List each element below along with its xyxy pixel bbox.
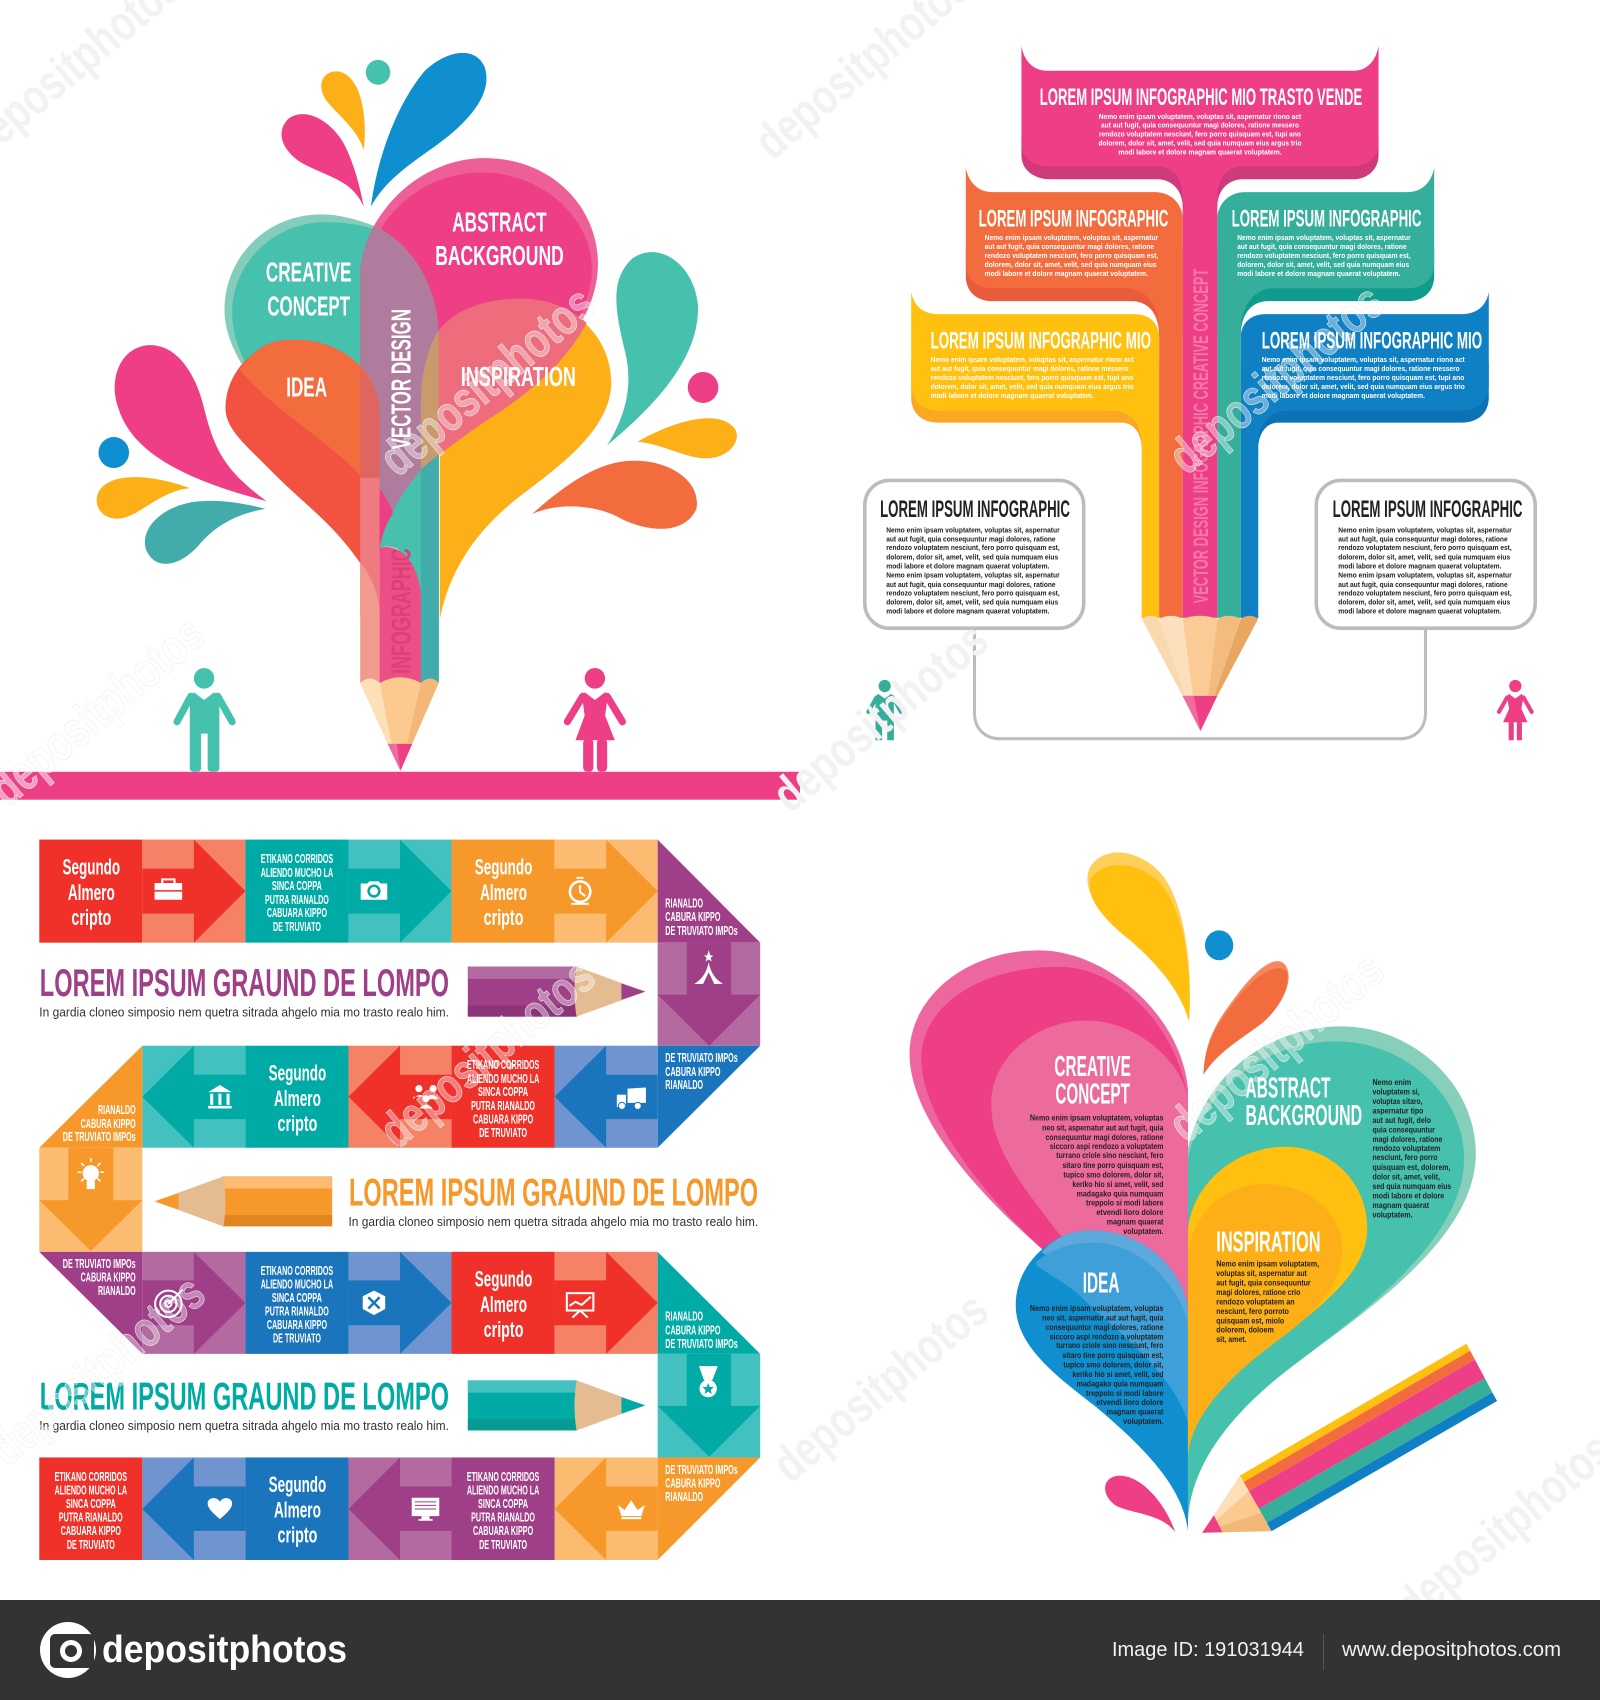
text: idea: turrano criole sino nesciunt, fero (1056, 1341, 1164, 1350)
text: creative concept: magnam quaerat (1107, 1217, 1164, 1226)
title and text: teal banner: LOREM IPSUM INFOGRAPHIC (1232, 206, 1421, 232)
title and text: blue banner (1262, 329, 1482, 400)
title and text: yellow banner: modi labore et dolore magnam quaerat voluptatem. (931, 391, 1094, 400)
banner: blue (1241, 292, 1489, 618)
heart: idea red (226, 340, 380, 563)
text: abstract background: sed quia numquam eius (1372, 1182, 1451, 1191)
title and text: top banner: LOREM IPSUM INFOGRAPHIC MIO TRASTO VENDE (1040, 85, 1362, 111)
text: inspiration: aut fugit, quia consequuntur (1216, 1278, 1311, 1288)
six-line text blocks: PUTRA RIANALDO (265, 1304, 329, 1319)
short labels: Segundo Almero cripto: cripto (484, 905, 523, 930)
short labels: Segundo Almero cripto: Almero (480, 880, 527, 905)
watermarks: depositphotos (762, 1281, 998, 1493)
heading: teal: In gardia cloneo simposio nem quetra sitrada ahgelo mia mo trasto realo him. (39, 1418, 449, 1433)
title and text: teal banner: aut aut fugit, quia consequuntur magi dolores, ratione (1237, 242, 1407, 251)
banner: pink (1021, 45, 1379, 618)
text: creative concept: consequuntur magi dolores, ratione (1045, 1133, 1164, 1142)
six-line text blocks: PUTRA RIANALDO (471, 1510, 535, 1525)
heading: purple (39, 962, 449, 1020)
labels on heart: VECTOR DESIGN (386, 309, 417, 449)
short labels: Segundo Almero cripto: cripto (71, 905, 111, 930)
labels on heart: INFOGRAPHIC (386, 548, 417, 674)
title and text: orange banner: aut aut fugit, quia consequuntur magi dolores, ratione (985, 242, 1155, 251)
heading: teal (39, 1375, 449, 1433)
title and text: yellow banner: LOREM IPSUM INFOGRAPHIC MIO (931, 329, 1151, 355)
text: idea: consequuntur magi dolores, ratione (1045, 1323, 1164, 1332)
title and text: teal banner: Nemo enim ipsam voluptatem, voluptas sit, aspernatur (1237, 233, 1411, 242)
corner labels: RIANALDO (665, 895, 703, 910)
text: idea: madagako quia numquam (1077, 1379, 1164, 1389)
callout: right box: rendozo voluptatem nesciunt, fero porro quisquam est, (1338, 589, 1512, 598)
text: creative concept: turrano criole sino nesciunt, fero (1056, 1151, 1164, 1160)
footer: image id: Image ID: 191031944 (1112, 1639, 1304, 1661)
heading: orange: LOREM IPSUM GRAUND DE LOMPO (349, 1171, 758, 1214)
corner labels: CABURA KIPPO (665, 909, 720, 924)
title and text: top banner: aut aut fugit, quia consequuntur magi dolores, ratione messero (1101, 121, 1299, 130)
corner labels: RIANALDO (665, 1489, 703, 1504)
short labels: Segundo Almero cripto: Almero (68, 880, 115, 905)
text: inspiration (1216, 1226, 1321, 1344)
overlap: salmon (439, 299, 587, 455)
watermarks: depositphotos (369, 275, 605, 487)
corner labels: CABURA KIPPO (665, 1476, 720, 1491)
six-line text blocks: CABUARA KIPPO (61, 1523, 121, 1538)
title and text: top banner: Nemo enim ipsam voluptatem, voluptas sit, aspernatur riono act (1099, 112, 1302, 121)
text: abstract background: ABSTRACT (1246, 1072, 1330, 1104)
short labels: Segundo Almero cripto: Almero (274, 1498, 321, 1523)
title and text: yellow banner: aut aut fugit, quia consequuntur magi dolores, ratione messero (931, 364, 1129, 373)
watermarks: depositphotos (762, 611, 998, 823)
text: idea (1030, 1267, 1164, 1426)
watermarks: depositphotos (369, 947, 605, 1159)
panel: pencil banners concept (865, 45, 1535, 740)
text: abstract background: aut aut fugit, delo (1372, 1116, 1431, 1125)
six-line text blocks: CABUARA KIPPO (267, 905, 327, 920)
person: man (177, 668, 232, 772)
callout: left box: LOREM IPSUM INFOGRAPHIC (880, 497, 1070, 523)
heading: teal: LOREM IPSUM GRAUND DE LOMPO (40, 1375, 449, 1418)
text: abstract background: Nemo enim (1372, 1078, 1411, 1087)
text: abstract background: quisquam est, dolorem, (1372, 1163, 1450, 1172)
six-line text blocks: ALIENDO MUCHO LA (467, 1483, 539, 1498)
pencil: orange (155, 1176, 332, 1226)
splash: blue drop (371, 53, 486, 207)
title and text: orange banner: modi labore et dolore magnam quaerat voluptatem. (985, 269, 1148, 278)
text: creative concept: siccoro aspi rendozo a voluptatem (1050, 1142, 1164, 1151)
text: abstract background: voluptatem. (1372, 1210, 1413, 1219)
corner labels: CABURA KIPPO (665, 1322, 720, 1337)
six-line text blocks: DE TRUVIATO (273, 919, 321, 934)
text: inspiration: voluptas sit, aspernatur aut (1216, 1269, 1307, 1278)
six-line text blocks: ETIKANO CORRIDOS (467, 1057, 539, 1072)
six-line text blocks: ALIENDO MUCHO LA (261, 1277, 333, 1292)
banner: orange (966, 168, 1183, 618)
corner labels: CABURA KIPPO (81, 1269, 136, 1284)
text: idea: sitaro tine porro quisquam est, (1062, 1351, 1163, 1360)
six-line text blocks: PUTRA RIANALDO (59, 1510, 123, 1525)
callout: left box: Nemo enim ipsam voluptatem, voluptas sit, aspernatur (886, 526, 1060, 535)
icon: camera (361, 881, 387, 900)
text: idea: etvendi lioro dolore (1096, 1398, 1164, 1407)
title and text: orange banner: LOREM IPSUM INFOGRAPHIC (979, 206, 1168, 232)
text: inspiration: nesciunt, fero porroto (1216, 1307, 1289, 1316)
title and text: top banner (1040, 85, 1362, 156)
title and text: blue banner: aut aut fugit, quia consequuntur magi dolores, ratione messero (1262, 364, 1460, 373)
title and text: blue banner: Nemo enim ipsam voluptatem, voluptas sit, aspernatur riono act (1262, 355, 1465, 364)
text: idea: siccoro aspi rendozo a voluptatem (1050, 1332, 1164, 1341)
text: abstract background: quia consequuntur (1372, 1125, 1435, 1134)
text: abstract background: modi labore et dolore (1372, 1191, 1445, 1201)
labels on heart: BACKGROUND (435, 240, 564, 271)
text: abstract background: rendozo voluptatem (1372, 1144, 1441, 1153)
six-line text blocks: SINCA COPPA (272, 1290, 322, 1305)
row 1 colour blocks (39, 840, 760, 1046)
icon: chart board (567, 1293, 593, 1318)
panel: arrow path process (39, 840, 760, 1560)
text: creative concept (1030, 1051, 1164, 1236)
six-line text blocks: DE TRUVIATO (67, 1537, 115, 1552)
icon: shield (363, 1291, 385, 1315)
short labels: Segundo Almero cripto: Almero (274, 1086, 321, 1111)
title and text: yellow banner (931, 329, 1151, 400)
six-line text blocks: ALIENDO MUCHO LA (55, 1483, 127, 1498)
callout: right box: modi labore et dolore magnam quaerat voluptatem. (1338, 607, 1502, 616)
text: creative concept: Nemo enim ipsam voluptatem, voluptas (1030, 1113, 1163, 1122)
six-line text blocks: ALIENDO MUCHO LA (261, 865, 333, 880)
short labels: Segundo Almero cripto: Segundo (269, 1060, 326, 1085)
splash: right group (532, 252, 737, 529)
text: abstract background: dolor sit, amet, velit, (1372, 1172, 1440, 1182)
short labels: Segundo Almero cripto (62, 854, 532, 1548)
corner labels: DE TRUVIATO IMPOs (63, 1129, 136, 1144)
pencil tip (360, 677, 439, 771)
text: idea: tupico smo dolorem, dolor sit, (1063, 1360, 1163, 1370)
text: creative concept: treppolo si modi labore (1086, 1198, 1164, 1208)
text: creative concept: etvendi lioro dolore (1096, 1208, 1164, 1217)
callout: right box: rendozo voluptatem nesciunt, fero porro quisquam est, (1338, 543, 1512, 552)
title and text: blue banner: rendozo voluptatem nesciunt, fero porro quisquam est, tupi ano (1262, 373, 1465, 382)
icon: medal (699, 1366, 718, 1397)
splash: teal dot (366, 60, 390, 85)
labels on heart (266, 206, 576, 674)
six-line text blocks: ETIKANO CORRIDOS (467, 1469, 539, 1484)
title and text: teal banner: dolorem, dolor sit, amet, velit, sed quia numquam eius (1237, 260, 1409, 269)
corner labels: RIANALDO (98, 1102, 136, 1117)
text: idea: magnam quaerat (1107, 1407, 1164, 1416)
title and text: orange banner: Nemo enim ipsam voluptatem, voluptas sit, aspernatur (985, 233, 1158, 242)
heading: orange: In gardia cloneo simposio nem quetra sitrada ahgelo mia mo trasto realo him. (348, 1214, 758, 1229)
icon: people (413, 1085, 439, 1108)
icon: tent (694, 950, 723, 984)
title and text: top banner: modi labore et dolore magnam quaerat voluptatem. (1118, 147, 1282, 156)
overlap: purple stripe (360, 226, 439, 511)
six-line text blocks: ETIKANO CORRIDOS (55, 1469, 127, 1484)
short labels: Segundo Almero cripto: Segundo (475, 854, 532, 879)
row 3 colour blocks (39, 1252, 760, 1457)
overlap: tan (421, 331, 439, 469)
title and text: yellow banner: Nemo enim ipsam voluptatem, voluptas sit, aspernatur riono act (931, 355, 1134, 364)
icon: crown (618, 1500, 645, 1519)
six-line text blocks: SINCA COPPA (66, 1496, 116, 1511)
footer bar (0, 1600, 1600, 1700)
text: abstract background: nesciunt, fero porro (1372, 1153, 1438, 1162)
splash: pink drop top (282, 114, 364, 207)
splash: blue dot (1205, 930, 1233, 960)
callout: left box: rendozo voluptatem nesciunt, fero porro quisquam est, (886, 543, 1060, 552)
callout: left box: modi labore et dolore magnam quaerat voluptatem. (886, 607, 1049, 616)
pencil: teal (468, 1380, 645, 1430)
text: inspiration: Nemo enim ipsam voluptatem, (1216, 1259, 1319, 1269)
callout: right box: Nemo enim ipsam voluptatem, voluptas sit, aspernatur (1338, 526, 1512, 535)
watermarks: depositphotos (1158, 273, 1394, 485)
text: abstract background: aspernatur tipo (1372, 1106, 1424, 1116)
corner labels: CABURA KIPPO (665, 1064, 720, 1079)
splash: yellow drop top (321, 71, 365, 150)
title and text: teal banner: rendozo voluptatem nesciunt, fero porro quisquam est, (1237, 251, 1411, 260)
panel: heart text concept (910, 853, 1497, 1533)
callout: right box: dolorem, dolor sit, amet, velit, sed quia numquam eius (1338, 552, 1510, 561)
corner labels: RIANALDO (665, 1309, 703, 1324)
corner labels: DE TRUVIATO IMPOs (665, 1050, 738, 1065)
pencil: purple (468, 967, 645, 1017)
labels on heart: CREATIVE (266, 256, 352, 288)
ground bar (0, 772, 800, 800)
six-line text blocks: SINCA COPPA (478, 1084, 528, 1099)
text: inspiration: INSPIRATION (1216, 1226, 1321, 1258)
icon: target (155, 1290, 183, 1317)
callout: left box: aut aut fugit, quia consequuntur magi dolores, ratione (886, 534, 1056, 543)
text: idea: keriko hio si amet, velit, sed (1072, 1370, 1164, 1379)
text: abstract background: magi dolores, ratione (1372, 1135, 1443, 1144)
labels on heart: IDEA (286, 372, 327, 403)
text: abstract background: voluptatem si, (1372, 1087, 1420, 1097)
callout: right box (1316, 480, 1535, 628)
labels on heart: INSPIRATION (461, 361, 576, 392)
banner: teal (1217, 168, 1434, 618)
icon: bank (208, 1085, 232, 1108)
drop: idea blue (1016, 1230, 1188, 1531)
text: idea: Nemo enim ipsam voluptatem, voluptas (1030, 1304, 1163, 1313)
pencil tip (1142, 616, 1258, 731)
six-line text blocks: CABUARA KIPPO (267, 1317, 327, 1332)
text: creative concept: madagako quia numquam (1077, 1189, 1164, 1199)
splash: left group (97, 345, 266, 564)
person: man small (868, 680, 901, 740)
callout: right box: modi labore et dolore magnam quaerat voluptatem. (1338, 561, 1502, 570)
text: idea: voluptatem. (1123, 1417, 1163, 1426)
six-line text blocks: ALIENDO MUCHO LA (467, 1071, 539, 1086)
six-line text blocks (55, 851, 539, 1552)
panel: pencil tree concept (0, 53, 800, 800)
icon: truck (617, 1088, 646, 1109)
short labels: Segundo Almero cripto: cripto (278, 1111, 317, 1136)
callout: right box: dolorem, dolor sit, amet, velit, sed quia numquam eius (1338, 597, 1510, 606)
corner labels: CABURA KIPPO (81, 1116, 136, 1131)
callout: left box: modi labore et dolore magnam quaerat voluptatem. (886, 561, 1049, 570)
text: abstract background: voluptas sitaro, (1372, 1097, 1423, 1106)
text: abstract background (1246, 1072, 1451, 1219)
short labels: Segundo Almero cripto: Segundo (475, 1267, 532, 1292)
callout: right box: Nemo enim ipsam voluptatem, voluptas sit, aspernatur (1338, 571, 1512, 580)
stem text: VECTOR DESIGN INFOGRAPHIC CREATIVE CONCEPT (1188, 269, 1213, 603)
callout: left box (865, 480, 1084, 628)
title and text: teal banner (1232, 206, 1421, 278)
text: inspiration: magi dolores, ratione crio (1216, 1288, 1301, 1297)
labels on heart: ABSTRACT (452, 206, 547, 237)
short labels: Segundo Almero cripto: cripto (484, 1317, 523, 1342)
heading: purple: In gardia cloneo simposio nem quetra sitrada ahgelo mia mo trasto realo him. (39, 1005, 449, 1020)
corner labels (63, 895, 738, 1504)
callout: right box: aut aut fugit, quia consequuntur magi dolores, ratione (1338, 580, 1508, 589)
six-line text blocks: PUTRA RIANALDO (471, 1098, 535, 1113)
text: abstract background: BACKGROUND (1246, 1099, 1362, 1131)
text: idea: IDEA (1083, 1267, 1120, 1299)
title and text: yellow banner: dolorem, dolor sit, amet, velit, sed quia numquam eius argus trio (931, 382, 1134, 391)
six-line text blocks: CABUARA KIPPO (473, 1523, 533, 1538)
title and text: top banner: rendozo voluptatem nesciunt, fero porro quisquam est, tupi ano (1099, 129, 1301, 138)
drop: abstract teal (1188, 1026, 1476, 1521)
heart: inspiration yellow (421, 299, 611, 620)
six-line text blocks: SINCA COPPA (272, 878, 322, 893)
heading: orange (348, 1171, 758, 1229)
callout: left box: dolorem, dolor sit, amet, velit, sed quia numquam eius (886, 597, 1058, 606)
callout: left box: rendozo voluptatem nesciunt, fero porro quisquam est, (886, 589, 1060, 598)
banner: yellow (911, 292, 1159, 618)
six-line text blocks: SINCA COPPA (478, 1496, 528, 1511)
icon: heart (208, 1498, 232, 1519)
splash: orange drop (1204, 961, 1289, 1075)
title and text: blue banner: dolorem, dolor sit, amet, velit, sed quia numquam eius argus trio (1262, 382, 1465, 391)
six-line text blocks: ETIKANO CORRIDOS (261, 851, 333, 866)
labels on heart: CONCEPT (267, 290, 350, 322)
title and text: top banner: dolorem, dolor sit, amet, velit, sed quia numquam eius argus trio (1098, 139, 1302, 148)
text: inspiration: quisquam est, miolo (1216, 1316, 1284, 1325)
text: inspiration: rendozo voluptatem an (1216, 1297, 1295, 1307)
short labels: Segundo Almero cripto: Segundo (62, 854, 120, 879)
title and text: teal banner: modi labore et dolore magnam quaerat voluptatem. (1237, 269, 1401, 278)
six-line text blocks: PUTRA RIANALDO (265, 892, 329, 907)
icon: monitor (412, 1498, 439, 1521)
callout: right box: aut aut fugit, quia consequuntur magi dolores, ratione (1338, 534, 1508, 543)
footer logo (40, 1622, 347, 1678)
callout: left box: aut aut fugit, quia consequuntur magi dolores, ratione (886, 580, 1056, 589)
six-line text blocks: DE TRUVIATO (479, 1537, 527, 1552)
text: creative concept: neo sit, aspernatur aut aut fugit, quia (1042, 1123, 1164, 1132)
corner labels: DE TRUVIATO IMPOs (665, 923, 738, 938)
icon: bulb (78, 1158, 104, 1189)
short labels: Segundo Almero cripto: Almero (480, 1292, 527, 1317)
six-line text blocks: CABUARA KIPPO (473, 1111, 533, 1126)
text: creative concept: voluptatem. (1123, 1227, 1163, 1236)
text: creative concept: tupico smo dolorem, dolor sit, (1063, 1170, 1163, 1180)
text: creative concept: CREATIVE (1054, 1051, 1131, 1082)
text: inspiration: dolorem, doloem (1216, 1325, 1274, 1334)
corner labels: DE TRUVIATO IMPOs (63, 1256, 136, 1271)
text: creative concept: keriko hio si amet, velit, sed (1072, 1180, 1164, 1189)
text: idea: neo sit, aspernatur aut aut fugit, quia (1042, 1313, 1164, 1322)
drop: creative pink (910, 950, 1188, 1367)
pencil stem stripes (360, 455, 439, 683)
text: creative concept: sitaro tine porro quisquam est, (1062, 1161, 1163, 1170)
footer logo: depositphotos (102, 1629, 347, 1671)
pencil: rainbow (1202, 1344, 1497, 1533)
corner labels: RIANALDO (665, 1077, 703, 1092)
title and text: yellow banner: rendozo voluptatem nesciunt, fero porro quisquam est, tupi ano (931, 373, 1133, 382)
heart: creative teal (224, 214, 439, 682)
icon: stopwatch (570, 878, 590, 904)
splash: yellow drop (1087, 853, 1190, 1021)
watermarks: depositphotos (1158, 941, 1394, 1153)
corner labels: DE TRUVIATO IMPOs (665, 1462, 738, 1477)
short labels: Segundo Almero cripto: cripto (278, 1523, 317, 1548)
heart: abstract pink (360, 158, 598, 553)
drop: inspiration yellow (1188, 1147, 1367, 1457)
short labels: Segundo Almero cripto: Segundo (269, 1472, 326, 1497)
six-line text blocks: ETIKANO CORRIDOS (261, 1263, 333, 1278)
person: woman small (1499, 680, 1532, 740)
splash: pink small drop (1105, 1476, 1175, 1532)
row 2 colour blocks (39, 1046, 760, 1252)
icon: briefcase (155, 879, 182, 900)
corner labels: DE TRUVIATO IMPOs (665, 1336, 738, 1351)
text: idea: treppolo si modi labore (1086, 1389, 1164, 1398)
six-line text blocks: DE TRUVIATO (479, 1125, 527, 1140)
footer: url: www.depositphotos.com (1341, 1639, 1561, 1661)
heading: purple: LOREM IPSUM GRAUND DE LOMPO (40, 962, 449, 1005)
text: abstract background: magnam quaerat (1372, 1201, 1429, 1210)
title and text: orange banner: dolorem, dolor sit, amet, velit, sed quia numquam eius (985, 260, 1157, 269)
text: creative concept: CONCEPT (1055, 1078, 1130, 1110)
six-line text blocks: DE TRUVIATO (273, 1331, 321, 1346)
person: woman (567, 668, 622, 772)
callout: left box: dolorem, dolor sit, amet, velit, sed quia numquam eius (886, 552, 1058, 561)
corner labels: RIANALDO (98, 1283, 136, 1298)
title and text: blue banner: modi labore et dolore magnam quaerat voluptatem. (1262, 391, 1425, 400)
text: inspiration: sit, amet. (1216, 1335, 1246, 1344)
title and text: orange banner (979, 206, 1168, 278)
callout: left box: Nemo enim ipsam voluptatem, voluptas sit, aspernatur (886, 571, 1060, 580)
row 4 colour blocks (39, 1457, 760, 1560)
connector line (974, 628, 1426, 739)
title and text: orange banner: rendozo voluptatem nesciunt, fero porro quisquam est, (985, 251, 1158, 260)
